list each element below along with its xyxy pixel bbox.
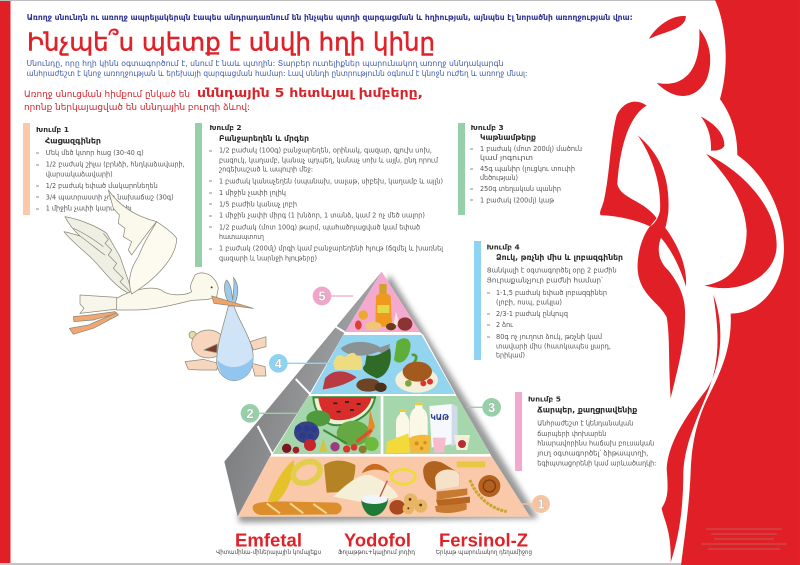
left red stripe <box>0 1 10 563</box>
panel: group 1: Խումբ 1 <box>36 125 69 134</box>
tier 3: dairy: ԿԱԹ <box>430 413 450 422</box>
panel: group 3: Խումբ 3 <box>471 123 504 132</box>
label 4: 4 <box>275 357 282 371</box>
tier 4: fish, poultry, legumes <box>311 335 455 394</box>
panel: group 1 <box>23 123 185 215</box>
panel: group 3: կամ յոգուրտ <box>480 153 533 162</box>
panel: group 2: շոգեխաշած և ապուրի մեջ: <box>219 165 313 174</box>
panel: group 2: 1 բաժակ կանաչեղեն (սպանախ, սալաթ, սիբեխ, կաղամբ և այլն) <box>219 176 443 185</box>
red silhouette panel: pregnant woman <box>600 0 800 565</box>
stork carrying baby <box>64 190 266 381</box>
panel: group 5 <box>515 392 656 471</box>
tier 3: dairy <box>383 396 490 454</box>
label 1 <box>518 495 550 513</box>
label 3: 3 <box>488 401 495 415</box>
secondary feathers <box>108 190 157 255</box>
panel: group 5: հնարավորինս հաճախ բուսական <box>537 439 654 448</box>
panel: group 2: բազուկ, կաղամբ, կանաչ պղպեղ, կանաչ սոխ և այլն, ընդ որում <box>219 156 438 165</box>
intro paragraph: Սնունդը, որը հղի կինն օգտագործում է, սնում է նաև պտղին: Տարբեր ուտելիքներ պարունակող առողջ սննդակարգն <box>26 59 504 68</box>
intro paragraph <box>26 59 528 78</box>
label 5: 5 <box>318 290 326 304</box>
panel: group 2: 1/2 բաժակ (100գ) բանջարեղեն, օրինակ, գազար, գլուխ սոխ, <box>219 146 432 155</box>
panel: group 2: Բանջարեղեն և մրգեր <box>219 134 309 143</box>
tail <box>80 295 123 313</box>
panel: group 4 <box>474 241 623 360</box>
panel: group 4: տավարի միս (հատկապես լյարդ, <box>496 341 611 350</box>
panel: group 2: 1 միջին չափի միրգ (1 խնձոր, 1 տանձ, կամ 2 ոչ մեծ սալոր) <box>219 211 425 220</box>
product: Emfetal: Emfetal <box>235 530 302 551</box>
label 2: 2 <box>246 407 254 421</box>
body <box>117 273 218 310</box>
product: Fersinol-Z: Երկաթ պարունակող դեղամիջոց <box>436 549 532 556</box>
panel: group 4: 1-1,5 բաժակ եփած լոբազգիներ <box>496 288 607 297</box>
baby <box>185 330 266 376</box>
subheading: five food groups: սննդային 5 հետևյալ խմբերը, <box>197 85 423 100</box>
panel: group 3: մեծության) <box>480 173 518 182</box>
pyramid shaded side <box>224 272 382 517</box>
panel: group 2: 1/5 բաժին կանաչ լոբի <box>219 199 297 208</box>
tier 2: vegetables and fruit <box>273 396 381 454</box>
label 5 <box>313 287 353 305</box>
panel: group 5: Խումբ 5 <box>528 395 561 404</box>
beak <box>212 296 253 308</box>
panel: group 2: 1/2 բաժակ (մոտ 100գ) թարմ, պահածոյացված կամ եփած <box>219 222 420 231</box>
panel: group 4: (լոբի, ոսպ, բակլա) <box>496 297 562 306</box>
panel: group 4: երիկամ) <box>496 350 525 359</box>
panel: group 3: 45գ պանիր (լուցկու տուփի <box>480 164 575 173</box>
product: Yodofol <box>338 530 415 556</box>
back wing <box>64 217 133 295</box>
legs <box>73 312 117 322</box>
panel: group 1: 3/4 պատրաստի չոր նախաճաշ (30գ) <box>46 192 174 201</box>
label 4 <box>269 354 330 373</box>
panel: group 5: եգիպտացորենի կամ արևածաղկի: <box>537 459 656 468</box>
food pyramid <box>224 272 550 523</box>
subheading: five food groups: որոնք ներկայացված են սննդային բուրգի ձևով: <box>24 103 250 113</box>
sack <box>217 277 253 381</box>
panel: group 1: 1/2 բաժակ շիլա (բրնձի, հնդկաձավարի, <box>46 160 185 169</box>
panel: group 4: 80գ ոչ յուղոտ ձուկ, թռչնի կամ <box>496 332 602 341</box>
tier 1: grains <box>238 457 530 517</box>
panel: group 3: 1 բաժակ (մոտ 200մլ) մածուն <box>480 144 582 153</box>
panel: group 2: 1 միջին չափի լոլիկ <box>219 188 286 197</box>
panel: group 5: յուղ օգտագործել՝ ձիթապտղի, <box>536 449 648 458</box>
product: Emfetal: Վիտամինա-միներալային կոմպլեքս <box>216 549 321 556</box>
panel: group 4: 2/3-1 բաժակ ընկույզ <box>496 309 568 318</box>
panel: group 5: Ճարպեր, քաղցրավենիք <box>537 406 637 415</box>
label 1: 1 <box>537 498 545 512</box>
top intro line: Առողջ սնունդն ու առողջ ապրելակերպն էապես անդրադառնում են ինչպես պտղի զարգացման և հղիության, այնպես էլ նորածնի առողջության վրա: <box>27 13 633 22</box>
panel: group 1: 1/2 բաժակ եփած մակարոնեղեն <box>46 181 158 190</box>
product: Yodofol: Yodofol <box>344 530 411 551</box>
subheading: five food groups: Առողջ սնուցման հիմքում ընկած են <box>24 90 190 100</box>
intro paragraph: անհրաժեշտ է կնոջ առողջության և երեխայի զարգացման համար: Լավ սննդի ընտրությունն օգնում է կնոջն ուժեղ և առողջ մնալ: <box>26 69 528 78</box>
product: Fersinol-Z: Fersinol-Z <box>439 530 528 551</box>
label 3 <box>467 398 501 417</box>
panel: group 1: վարսակաձավարի) <box>46 170 113 179</box>
panel: group 3: 1 բաժակ (200մլ) կաթ <box>480 195 555 204</box>
panel: group 2: Խումբ 2 <box>210 123 242 132</box>
panel: group 3: Կաթնամթերք <box>480 133 536 142</box>
panel: group 1: 1 միջին չափի կարտոֆիլ <box>46 204 133 213</box>
front wing <box>130 222 177 294</box>
panel: group 1: Հացազգիներ <box>45 136 101 146</box>
label 2 <box>241 404 298 423</box>
panel: group 5: Անհրաժեշտ է կենդանական <box>537 419 633 428</box>
panel: group 2 <box>195 123 444 267</box>
panel: group 4: 2 ձու <box>496 320 514 329</box>
panel: group 4: Խումբ 4 <box>487 242 520 251</box>
panel: group 1: Մեկ մեծ կտոր հաց (30-40 գ) <box>46 148 144 157</box>
subheading: five food groups <box>24 85 423 113</box>
product: Emfetal <box>216 530 321 556</box>
panel: group 2: հատապտուղ <box>219 232 264 241</box>
panel: group 4: Յուրաքանչյուր բաժնի համար՝ <box>487 276 603 285</box>
panel: group 4: Ձուկ, թռչնի միս և լոբազգիներ <box>496 253 623 262</box>
panel: group 2: գազարի և նարնջի հյութերը) <box>219 254 317 263</box>
title: Ինչպե՞ս պետք է սնվի հղի կինը <box>27 28 435 57</box>
panel: group 4: Ցանկալի է օգտագործել օրը 2 բաժին <box>487 265 617 274</box>
panel: group 3: 250գ տեղական պանիր <box>480 184 561 193</box>
fine print (illegible in the reference) <box>701 528 787 550</box>
product: Yodofol: Ֆոլաթթու+կալիում յոդիդ <box>338 549 415 556</box>
panel: group 3 <box>458 123 582 215</box>
panel: group 5: ճարպերի փոխարեն <box>537 429 606 438</box>
panel: group 2: 1 բաժակ (200մլ) մրգի կամ բանջարեղենի հյութ (ճզմել և խառնել <box>219 244 444 253</box>
tier 5: fats and sweets <box>345 272 420 332</box>
